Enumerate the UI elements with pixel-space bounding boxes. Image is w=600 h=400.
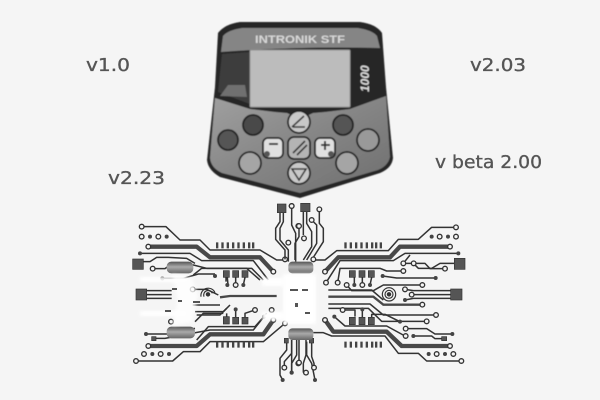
button: minus (263, 138, 283, 158)
device logo (220, 85, 247, 97)
chip and pads: top connector, right (289, 203, 322, 262)
device: metal detector control unit (207, 22, 393, 198)
chip and pads: top connector, left (277, 204, 301, 245)
device top band (221, 28, 380, 52)
device 1000 mark: 1000 (358, 65, 372, 92)
button: left outer (218, 130, 238, 150)
label: v2.23: v2.23 (108, 168, 165, 189)
traces: right lower (325, 320, 450, 346)
pads: bottom connector, left (281, 338, 301, 382)
chips (349, 258, 465, 341)
device casing (207, 22, 393, 198)
button: down (288, 162, 310, 184)
button: right upper (333, 115, 353, 135)
button: right outer (357, 129, 379, 151)
button: left upper (243, 115, 263, 135)
device screen (250, 50, 350, 107)
concentric target (382, 288, 396, 301)
bars (344, 242, 382, 348)
label: v beta 2.00: v beta 2.00 (435, 152, 542, 173)
traces: left lower (136, 323, 285, 361)
buttons (218, 111, 379, 184)
circuit board: right half (288, 203, 465, 382)
pads (323, 225, 464, 363)
label: v1.0: v1.0 (86, 55, 130, 76)
drums (167, 262, 195, 338)
device lower body (210, 96, 390, 193)
traces: top connector, right (295, 209, 323, 260)
pads (134, 224, 287, 363)
traces: left upper (142, 227, 285, 260)
traces: bottom connector, left (280, 340, 297, 380)
traces: bottom connector, right (292, 340, 315, 380)
pads: bottom connector, right (290, 338, 317, 382)
button: left lower (239, 152, 261, 174)
chips (133, 259, 248, 341)
button: right lower (336, 152, 358, 174)
bars (216, 242, 254, 348)
concentric target (201, 288, 215, 297)
traces: right upper (315, 227, 456, 260)
device name: INTRONIK STF (255, 34, 345, 46)
button: up (288, 111, 310, 133)
residual chip specks (165, 288, 310, 314)
device bezel shading (218, 52, 250, 104)
button: plus (315, 138, 335, 158)
circuit board: left half (133, 204, 301, 382)
washed-out centre of circuit (140, 274, 316, 326)
centre drums (288, 262, 313, 340)
button: centre (288, 137, 310, 159)
label: v2.03: v2.03 (470, 55, 526, 76)
traces: top connector, left (276, 206, 296, 262)
